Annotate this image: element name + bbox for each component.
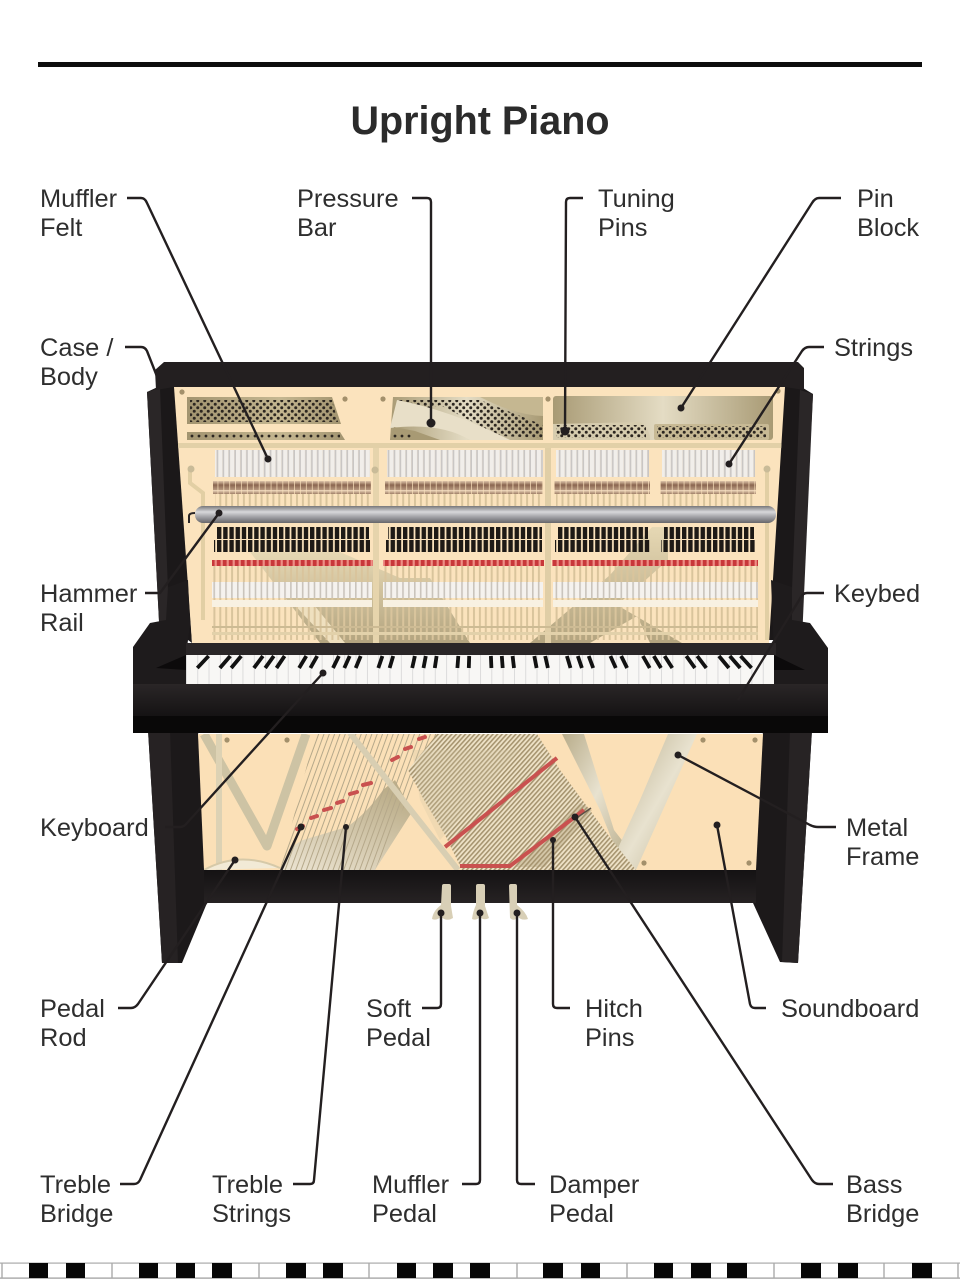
string lines upper [215, 494, 755, 506]
upright sides [147, 385, 813, 643]
label: Bass Bridge [572, 814, 919, 1228]
label: Muffler Felt: Felt [40, 214, 82, 242]
soft pedal [432, 884, 453, 920]
label: Treble Bridge: Treble [40, 1171, 111, 1199]
piano illustration [133, 362, 828, 963]
metal frame [204, 734, 697, 870]
label: Hammer Rail: Rail [40, 609, 84, 637]
muffler pedal [472, 884, 489, 920]
label: Muffler Pedal: Pedal [372, 1200, 437, 1228]
title: Upright Piano [351, 99, 609, 143]
label: Case / Body: Body [40, 363, 98, 391]
keybed blocks [133, 580, 828, 655]
label: Treble Bridge [40, 824, 304, 1228]
brown felt row [213, 481, 756, 494]
bridge shadow [516, 803, 592, 867]
label: Soundboard: Soundboard [781, 995, 919, 1023]
label: Treble Strings: Strings [212, 1200, 291, 1228]
red row [212, 560, 758, 566]
label: Pressure Bar: Pressure [297, 185, 399, 213]
label: Keybed: Keybed [834, 580, 920, 608]
label: Pedal Rod: Rod [40, 1024, 87, 1052]
label: Damper Pedal: Damper [549, 1171, 640, 1199]
label: Keybed [738, 580, 920, 700]
iron frame shapes [250, 527, 682, 643]
label: Damper Pedal: Pedal [549, 1200, 614, 1228]
pedals [432, 884, 528, 920]
label: Keyboard: Keyboard [40, 814, 149, 842]
label: Tuning Pins [560, 185, 675, 436]
label: Bass Bridge: Bridge [846, 1200, 919, 1228]
label: Case / Body: Case / [40, 334, 114, 362]
label: Muffler Pedal [372, 910, 484, 1228]
bass string hatch [408, 734, 636, 870]
label: Pressure Bar: Bar [297, 214, 337, 242]
label: Pin Block: Pin [857, 185, 894, 213]
label: Pin Block [678, 185, 919, 412]
damper pedal [509, 884, 528, 920]
label: Muffler Felt [40, 185, 272, 462]
muffler felt row [215, 450, 755, 477]
label: Damper Pedal [514, 910, 640, 1228]
hammer rail [189, 506, 776, 523]
label: Case / Body [40, 334, 158, 391]
label: Pressure Bar [297, 185, 436, 428]
label: Treble Strings [212, 824, 349, 1228]
treble bridge red [297, 737, 425, 829]
label: Metal Frame: Metal [846, 814, 908, 842]
label: Soft Pedal [366, 910, 444, 1052]
posts [188, 448, 770, 643]
label: Soundboard [714, 822, 919, 1023]
label: Hammer Rail [40, 510, 222, 637]
label: Pedal Rod [40, 856, 238, 1052]
keyboard [186, 655, 774, 684]
label: Keyboard [40, 670, 326, 842]
label: Tuning Pins: Tuning [598, 185, 675, 213]
label: Treble Strings: Treble [212, 1171, 283, 1199]
label: Tuning Pins: Pins [598, 214, 647, 242]
label: Strings [726, 334, 913, 468]
soundboard screws [224, 737, 758, 866]
label: Muffler Felt: Muffler [40, 185, 118, 213]
bottom keyboard strip [0, 1262, 960, 1279]
label: Metal Frame [674, 752, 919, 871]
pin block sections [176, 396, 782, 448]
label: Soft Pedal: Soft [366, 995, 411, 1023]
label: Hammer Rail: Hammer [40, 580, 138, 608]
upper panel [174, 387, 785, 643]
label: Treble Bridge: Bridge [40, 1200, 113, 1228]
top case [155, 362, 804, 390]
label: Strings: Strings [834, 334, 913, 362]
legs and lower case [148, 730, 812, 963]
keyslip [133, 684, 828, 733]
top rule [38, 62, 922, 67]
label: Pin Block: Block [857, 214, 919, 242]
bass bridge red [445, 758, 557, 847]
lower strings [212, 566, 758, 640]
label: Hitch Pins: Pins [585, 1024, 634, 1052]
keyboard side cheeks [133, 655, 828, 684]
treble strings [280, 734, 440, 870]
black keys [197, 656, 752, 668]
panel screws [179, 388, 781, 402]
soundboard panel [198, 733, 763, 870]
label: Metal Frame: Frame [846, 843, 919, 871]
label: Muffler Pedal: Muffler [372, 1171, 450, 1199]
label: Bass Bridge: Bass [846, 1171, 902, 1199]
label: Soft Pedal: Pedal [366, 1024, 431, 1052]
label: Hitch Pins: Hitch [585, 995, 643, 1023]
label: Hitch Pins [550, 837, 643, 1052]
black hammer rows [214, 527, 756, 552]
long diagonal strut [350, 733, 458, 870]
treble string fan [280, 780, 412, 870]
label: Pedal Rod: Pedal [40, 995, 105, 1023]
